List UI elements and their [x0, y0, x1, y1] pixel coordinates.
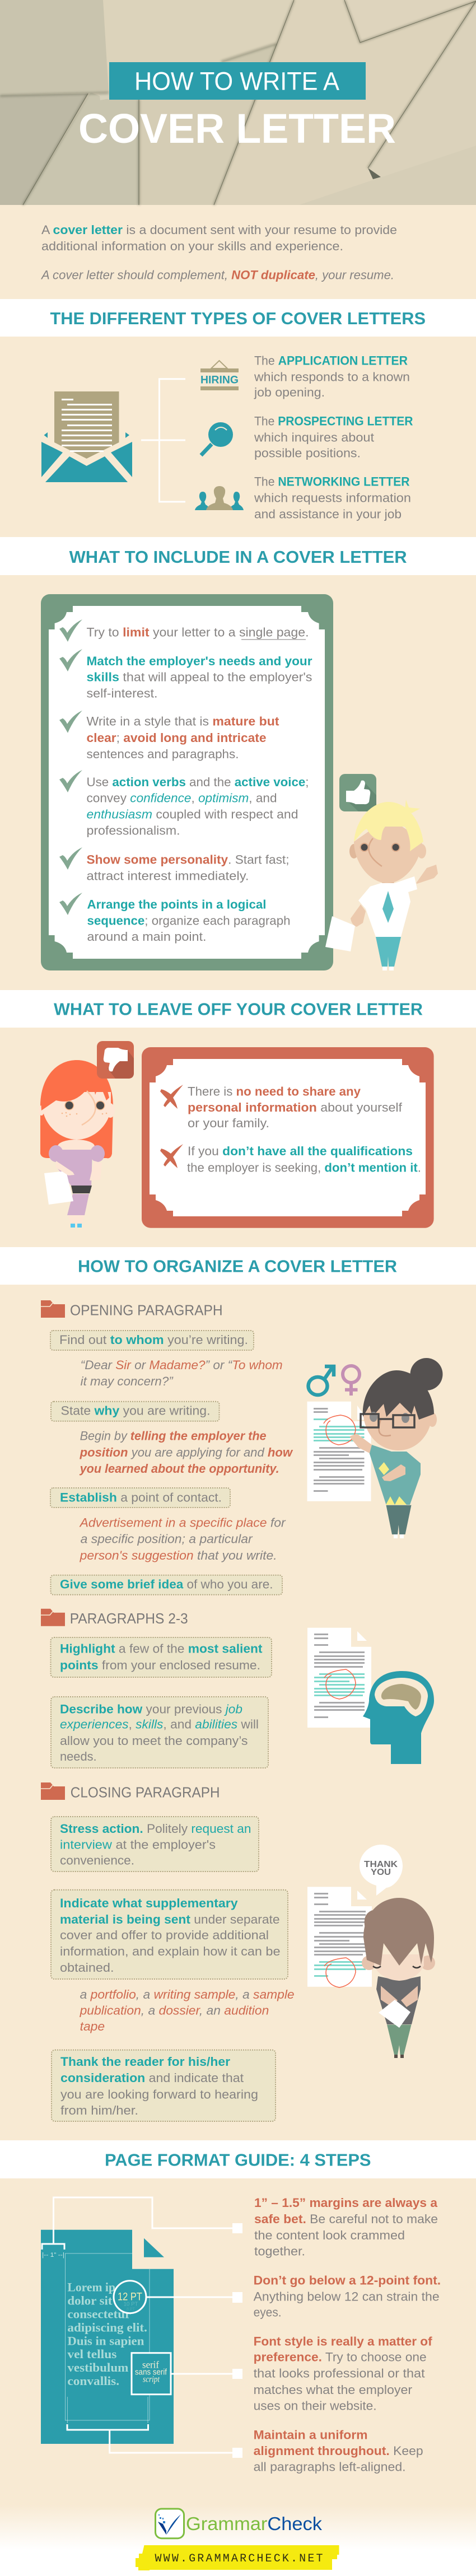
- checklist item: action verbs: professionalism.: [86, 824, 180, 838]
- character: bowing person: [362, 1898, 435, 2058]
- callout: why: [51, 1402, 220, 1421]
- step text: font style: Font style is really a matter of: [254, 2334, 432, 2348]
- checklist item: match: Match the employer's needs and your: [86, 654, 312, 668]
- speech bubble: thank you: THANK: [364, 1860, 398, 1869]
- checklist item: personality: attract interest immediately.: [86, 869, 249, 883]
- step text: margins: safe bet. Be careful not to make: [254, 2212, 438, 2226]
- connector: alignment: [110, 2430, 242, 2458]
- font size circle: 8 PT: [127, 2307, 136, 2312]
- callout: establish: [50, 1488, 230, 1508]
- checklist item: arrange: around a main point.: [87, 930, 206, 944]
- connector: font size: [147, 2292, 242, 2303]
- step text: alignment: alignment throughout. Keep: [254, 2444, 423, 2458]
- step text: font size: [254, 2273, 441, 2320]
- checklist item: action verbs: convey confidence, optimism, and: [86, 791, 277, 805]
- callout: stress action: [51, 1817, 259, 1872]
- note: portfolio: publication, a dossier, an audition: [80, 2004, 269, 2017]
- step text: font style: [254, 2334, 432, 2412]
- checklist item: arrange: sequence; organize each paragraph: [87, 914, 290, 928]
- title banner: [109, 62, 366, 100]
- icon: magnifier: [201, 422, 233, 455]
- note: salutation: “Dear Sir or Madame?” or “To whom: [81, 1358, 283, 1372]
- item: personal information: There is no need to share any: [188, 1085, 361, 1099]
- connector: font style: [171, 2369, 242, 2379]
- checklist item: match: [59, 649, 312, 701]
- icon: thumbs down: [97, 1041, 134, 1079]
- step text: margins: together.: [254, 2244, 305, 2258]
- heading band: include: [0, 537, 476, 575]
- text: networking letter: [254, 474, 411, 521]
- font style box: sans serif: [135, 2368, 167, 2377]
- text: application letter: which responds to a known: [254, 370, 410, 384]
- speech bubble: thank you: YOU: [371, 1868, 391, 1877]
- speech bubble: thank you: [360, 1845, 403, 1896]
- margin marker: [42, 2244, 64, 2258]
- callout: describe: allow you to meet the company’s: [60, 1734, 248, 1748]
- note: portfolio: a portfolio, a writing sample, a sample: [80, 1987, 295, 2001]
- callout: thank the reader: Thank the reader for his/her: [60, 2055, 230, 2069]
- sample lorem text: vestibulum: [67, 2360, 128, 2374]
- logo: GrammarCheck: [156, 2509, 323, 2538]
- callout: stress action: interview at the employer's: [60, 1838, 216, 1852]
- item: qualifications: the employer is seeking, don’t mention it.: [187, 1161, 421, 1175]
- panel: what to leave off: [142, 1047, 434, 1228]
- icon: hiring sign: HIRING: [200, 374, 239, 386]
- note: begin by: Begin by telling the employer the: [80, 1429, 267, 1443]
- intro text: [40, 223, 397, 282]
- logo: GrammarCheck: GrammarCheck: [186, 2513, 323, 2534]
- step text: margins: the content look crammed: [254, 2228, 405, 2242]
- title banner: HOW TO WRITE A: [134, 67, 339, 95]
- callout: stress action: Stress action. Politely request an: [60, 1822, 251, 1836]
- callout: stress action: convenience.: [60, 1854, 134, 1868]
- note: advertisement: person's suggestion that you write.: [80, 1548, 277, 1562]
- intro text: additional information on your skills and experience.: [41, 239, 343, 253]
- callout: thank the reader: [52, 2050, 276, 2121]
- checklist item: style: Write in a style that is mature but: [86, 715, 279, 729]
- callout: supplementary material: material is being sent under separate: [60, 1912, 280, 1926]
- checklist item: style: [59, 711, 279, 761]
- font size circle: [114, 2281, 146, 2313]
- sample lorem text: consectetur: [67, 2307, 131, 2321]
- sample lorem text: dolor sit: [67, 2294, 113, 2308]
- item: qualifications: [160, 1144, 421, 1175]
- step text: margins: 1” – 1.5” margins are always a: [254, 2196, 438, 2210]
- checklist item: limit: [59, 619, 309, 642]
- icon: thumbs up: [339, 774, 376, 811]
- callout: brief idea: Give some brief idea of who you are.: [60, 1578, 273, 1592]
- checklist item: match: skills that will appeal to the employer's: [86, 670, 312, 684]
- diagram: page layout: [41, 2230, 174, 2444]
- note: portfolio: tape: [80, 2019, 105, 2033]
- panel: what to include: [41, 594, 333, 970]
- item: personal information: [160, 1085, 403, 1130]
- callout: highlight: Highlight a few of the most salient: [60, 1642, 263, 1656]
- text: prospecting letter: possible positions.: [254, 446, 361, 460]
- footer url strip: WWW.GRAMMARCHECK.NET: [155, 2552, 323, 2565]
- step text: alignment: Maintain a uniform: [254, 2428, 368, 2442]
- subheading: closing paragraph: CLOSING PARAGRAPH: [71, 1784, 220, 1800]
- callout: supplementary material: cover and offer to provide additional: [60, 1928, 269, 1942]
- sample lorem text: [67, 2280, 147, 2388]
- heading band: organize: HOW TO ORGANIZE A COVER LETTER: [78, 1257, 397, 1276]
- heading band: types: THE DIFFERENT TYPES OF COVER LETTERS: [50, 309, 426, 328]
- sample lorem text: vel tellus: [67, 2347, 117, 2361]
- intro text: A cover letter should complement, NOT duplicate, your resume.: [40, 268, 394, 282]
- icon: hiring sign: [200, 361, 239, 390]
- text: prospecting letter: The PROSPECTING LETTER: [254, 414, 413, 428]
- document: closing letter: [307, 1887, 372, 1987]
- font style box: serif: [142, 2359, 159, 2370]
- sample lorem text: Lorem ip: [67, 2280, 115, 2294]
- font style box: [132, 2353, 171, 2395]
- heading band: leave off: WHAT TO LEAVE OFF YOUR COVER LETTER: [54, 1000, 423, 1019]
- subheading: paragraphs 2-3: PARAGRAPHS 2-3: [70, 1610, 188, 1627]
- text: application letter: job opening.: [254, 385, 325, 399]
- step text: font size: eyes.: [254, 2306, 282, 2320]
- footer gradient: [0, 2505, 476, 2550]
- checklist item: personality: [59, 847, 289, 883]
- callout: why: State why you are writing.: [60, 1404, 211, 1418]
- text: prospecting letter: which inquires about: [254, 430, 374, 444]
- icon: head with brain: [363, 1671, 434, 1764]
- step text: font size: Anything below 12 can strain the: [254, 2289, 440, 2303]
- alignment bracket: [67, 2424, 148, 2430]
- callout: describe: [51, 1697, 268, 1768]
- text: networking letter: The NETWORKING LETTER: [254, 474, 410, 488]
- note: begin by: you learned about the opportunity.: [80, 1462, 279, 1476]
- icon: gender symbols: [308, 1366, 360, 1396]
- item: personal information: or your family.: [188, 1116, 269, 1130]
- checklist item: match: self-interest.: [86, 687, 158, 701]
- heading band: page format: [0, 2140, 476, 2178]
- font size circle: 12 PT: [118, 2292, 142, 2303]
- step text: alignment: [254, 2428, 423, 2474]
- note: salutation: it may concern?”: [81, 1374, 174, 1388]
- callout: supplementary material: [51, 1890, 288, 1979]
- note: advertisement: Advertisement in a specific place for: [79, 1516, 286, 1530]
- checklist item: limit: Try to limit your letter to a single page.: [86, 626, 309, 640]
- font size circle: 10 PT: [123, 2302, 138, 2308]
- note: begin by: [80, 1429, 293, 1476]
- note: advertisement: a specific position; a particular: [81, 1532, 253, 1546]
- item: personal information: personal information about yourself: [188, 1100, 403, 1114]
- note: portfolio: [80, 1987, 295, 2033]
- checklist item: arrange: Arrange the points in a logical: [87, 898, 267, 912]
- callout: describe: needs.: [60, 1749, 97, 1763]
- step text: margins: [254, 2196, 438, 2258]
- title: cover letter: COVER LETTER: [78, 105, 396, 152]
- text: networking letter: which requests information: [254, 491, 411, 505]
- text: application letter: [254, 354, 410, 399]
- checklist item: action verbs: enthusiasm coupled with respect and: [86, 808, 298, 822]
- font style box: script: [143, 2374, 160, 2384]
- icon: envelope with letter: [41, 391, 132, 482]
- step text: font style: uses on their website.: [254, 2398, 377, 2412]
- hero: folded paper background: [0, 0, 476, 205]
- checklist item: arrange: [59, 893, 290, 944]
- step text: font style: matches what the employer: [254, 2383, 412, 2397]
- item: qualifications: If you don’t have all the qualifications: [188, 1144, 413, 1158]
- note: salutation: [81, 1358, 283, 1388]
- text: networking letter: and assistance in your job: [254, 507, 402, 521]
- callout: describe: experiences, skills, and abilities will: [60, 1718, 259, 1732]
- heading band: leave off: [0, 990, 476, 1028]
- heading band: page format: PAGE FORMAT GUIDE: 4 STEPS: [105, 2150, 371, 2169]
- checklist item: action verbs: [59, 770, 309, 838]
- callout: thank the reader: consideration and indicate that: [60, 2071, 244, 2085]
- step text: alignment: all paragraphs left-aligned.: [254, 2460, 406, 2474]
- checklist item: personality: Show some personality . Start fast;: [86, 853, 289, 867]
- step text: font size: Don’t go below a 12-point font.: [254, 2273, 441, 2287]
- callout: establish: Establish a point of contact.: [60, 1491, 222, 1505]
- note: advertisement: [79, 1516, 286, 1562]
- callout: highlight: points from your enclosed resume.: [60, 1658, 260, 1672]
- document: paragraphs letter: [307, 1628, 371, 1728]
- callout: supplementary material: information, and explain how it can be: [60, 1944, 281, 1958]
- callout: brief idea: [50, 1575, 282, 1595]
- margin marker: |-- 1” --|: [42, 2252, 64, 2258]
- note: begin by: position you are applying for and how: [80, 1445, 293, 1459]
- sample lorem text: Duis in sapien: [67, 2334, 144, 2348]
- character: girl with paper: [39, 1060, 115, 1228]
- connector lines: [141, 379, 185, 502]
- checklist item: style: clear; avoid long and intricate: [86, 731, 267, 745]
- callout: thank the reader: from him/her.: [60, 2103, 138, 2117]
- footer url strip: [136, 2545, 339, 2570]
- callout: to whom: Find out to whom you’re writing.: [59, 1333, 248, 1347]
- step text: font style: preference. Try to choose one: [254, 2350, 427, 2364]
- subheading: opening paragraph: OPENING PARAGRAPH: [70, 1301, 223, 1318]
- character: boy with paper: [325, 800, 438, 970]
- sample lorem text: adipiscing elit.: [67, 2320, 147, 2334]
- sample lorem text: convallis.: [67, 2374, 119, 2388]
- text: application letter: The APPLICATION LETTER: [254, 354, 408, 368]
- connector: margins: [54, 2197, 242, 2244]
- heading band: organize: [0, 1247, 476, 1285]
- callout: supplementary material: Indicate what supplementary: [60, 1896, 238, 1910]
- checklist item: action verbs: Use action verbs and the active voice;: [86, 775, 309, 789]
- callout: supplementary material: obtained.: [60, 1961, 114, 1975]
- intro text: A cover letter is a document sent with your resume to provide: [41, 223, 397, 237]
- document: opening paragraph letter: [307, 1402, 371, 1501]
- step text: font style: that looks professional or that: [254, 2367, 425, 2381]
- checklist item: style: sentences and paragraphs.: [86, 747, 239, 761]
- character: woman with glasses: [349, 1358, 442, 1538]
- text: prospecting letter: [254, 414, 413, 460]
- callout: to whom: [50, 1331, 254, 1350]
- callout: highlight: [50, 1637, 272, 1677]
- callout: thank the reader: you are looking forward to hearing: [60, 2088, 258, 2101]
- heading band: include: WHAT TO INCLUDE IN A COVER LETTER: [69, 547, 407, 567]
- icon: people: [195, 486, 244, 510]
- callout: describe: Describe how your previous job: [60, 1702, 242, 1716]
- heading band: types: [0, 299, 476, 337]
